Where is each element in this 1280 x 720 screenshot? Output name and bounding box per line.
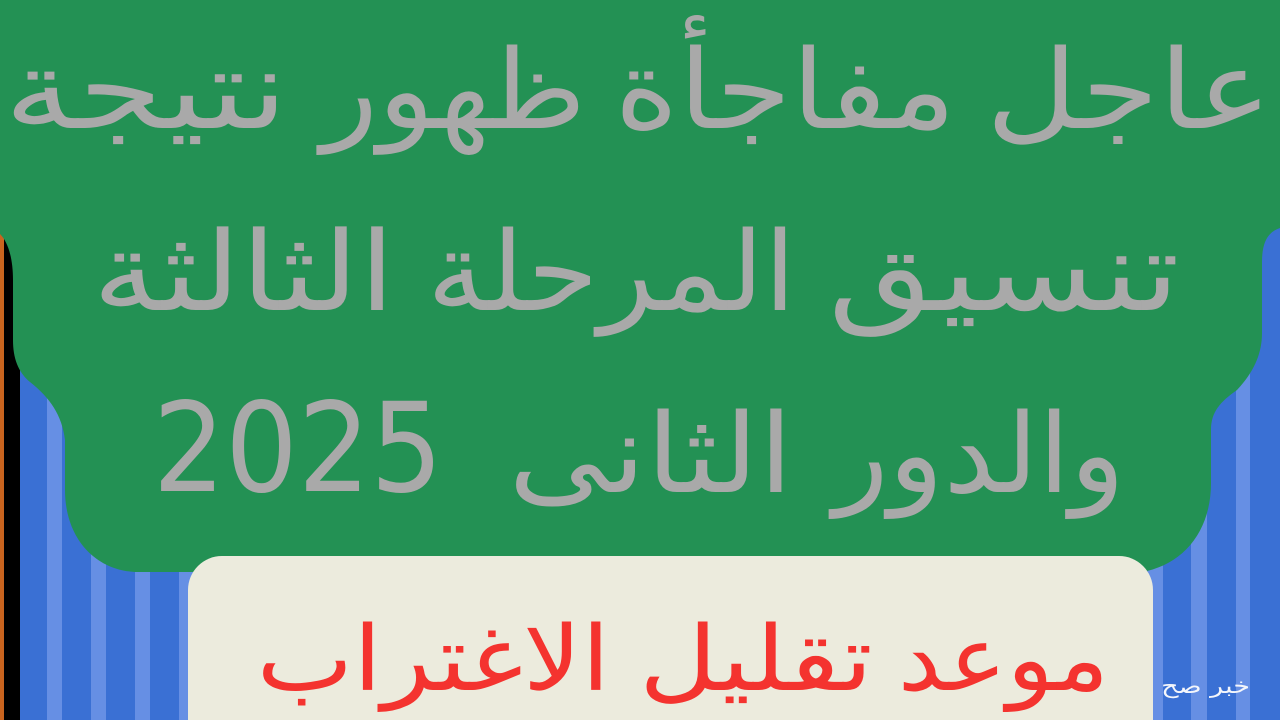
title line 3: والدور [828,391,1125,519]
title line 2: المرحلة [427,208,796,337]
title line 2 [92,208,1180,337]
watermark: خبر صح [1161,674,1250,698]
cream subtitle box [188,556,1153,720]
left edge black and orange bands [0,230,20,720]
subtitle: تقليل [639,607,873,712]
green title panel [0,0,1280,572]
title line 3 [153,377,1125,521]
title line 3: الثانى [508,390,793,518]
title line 3: 2025 [153,377,443,521]
subtitle: الاغتراب [257,606,610,712]
title line 1: مفاجأة [614,15,956,154]
subtitle [257,606,1109,712]
title line 1: نتيجة [4,26,288,154]
subtitle: موعد [898,607,1109,712]
title line 2: تنسيق [828,209,1180,337]
title line 1 [4,15,1272,155]
title line 1: عاجل [986,26,1272,154]
title line 1: ظهور [316,25,586,155]
title line 2: الثالثة [92,209,395,337]
